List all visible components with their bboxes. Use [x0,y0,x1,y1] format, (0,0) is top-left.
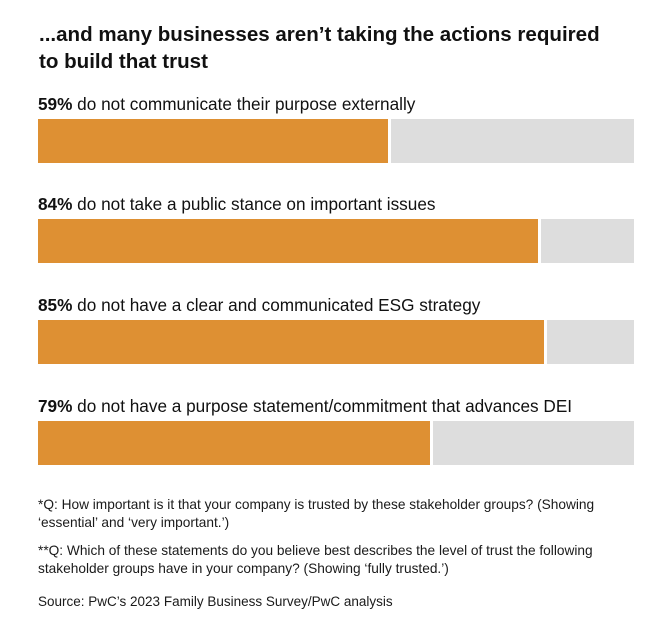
label: 85%: 85% do not have a clear and communicated ESG strategy [38,295,480,315]
bar: 85% [38,320,634,364]
bar: 59% [38,119,634,163]
footnote: importance question: *Q: How important is it that your company is trusted by these stakeholder groups? (Showing [38,496,594,512]
bar: 79% [38,421,634,465]
footnote: trust question: stakeholder groups have in your company? (Showing ‘fully trusted.’) [38,561,449,576]
title [39,23,600,73]
label: 79%: 79% do not have a purpose statement/commitment that advances DEI [38,396,572,416]
source: Source: PwC’s 2023 Family Business Survey/PwC analysis [38,594,393,608]
label: 84%: 84% do not take a public stance on important issues [38,194,435,214]
footnote: importance question: ‘essential’ and ‘very important.’) [38,515,229,530]
title: ...and many businesses aren’t taking the actions required [39,23,600,46]
footnote: importance question [38,496,594,530]
label: 59%: 59% do not communicate their purpose externally [38,94,415,114]
footnote: trust question: **Q: Which of these statements do you believe best describes the level of trust the following [38,542,593,558]
bar: 84% [38,219,634,263]
footnote: trust question [38,542,593,576]
title: to build that trust [39,50,208,73]
